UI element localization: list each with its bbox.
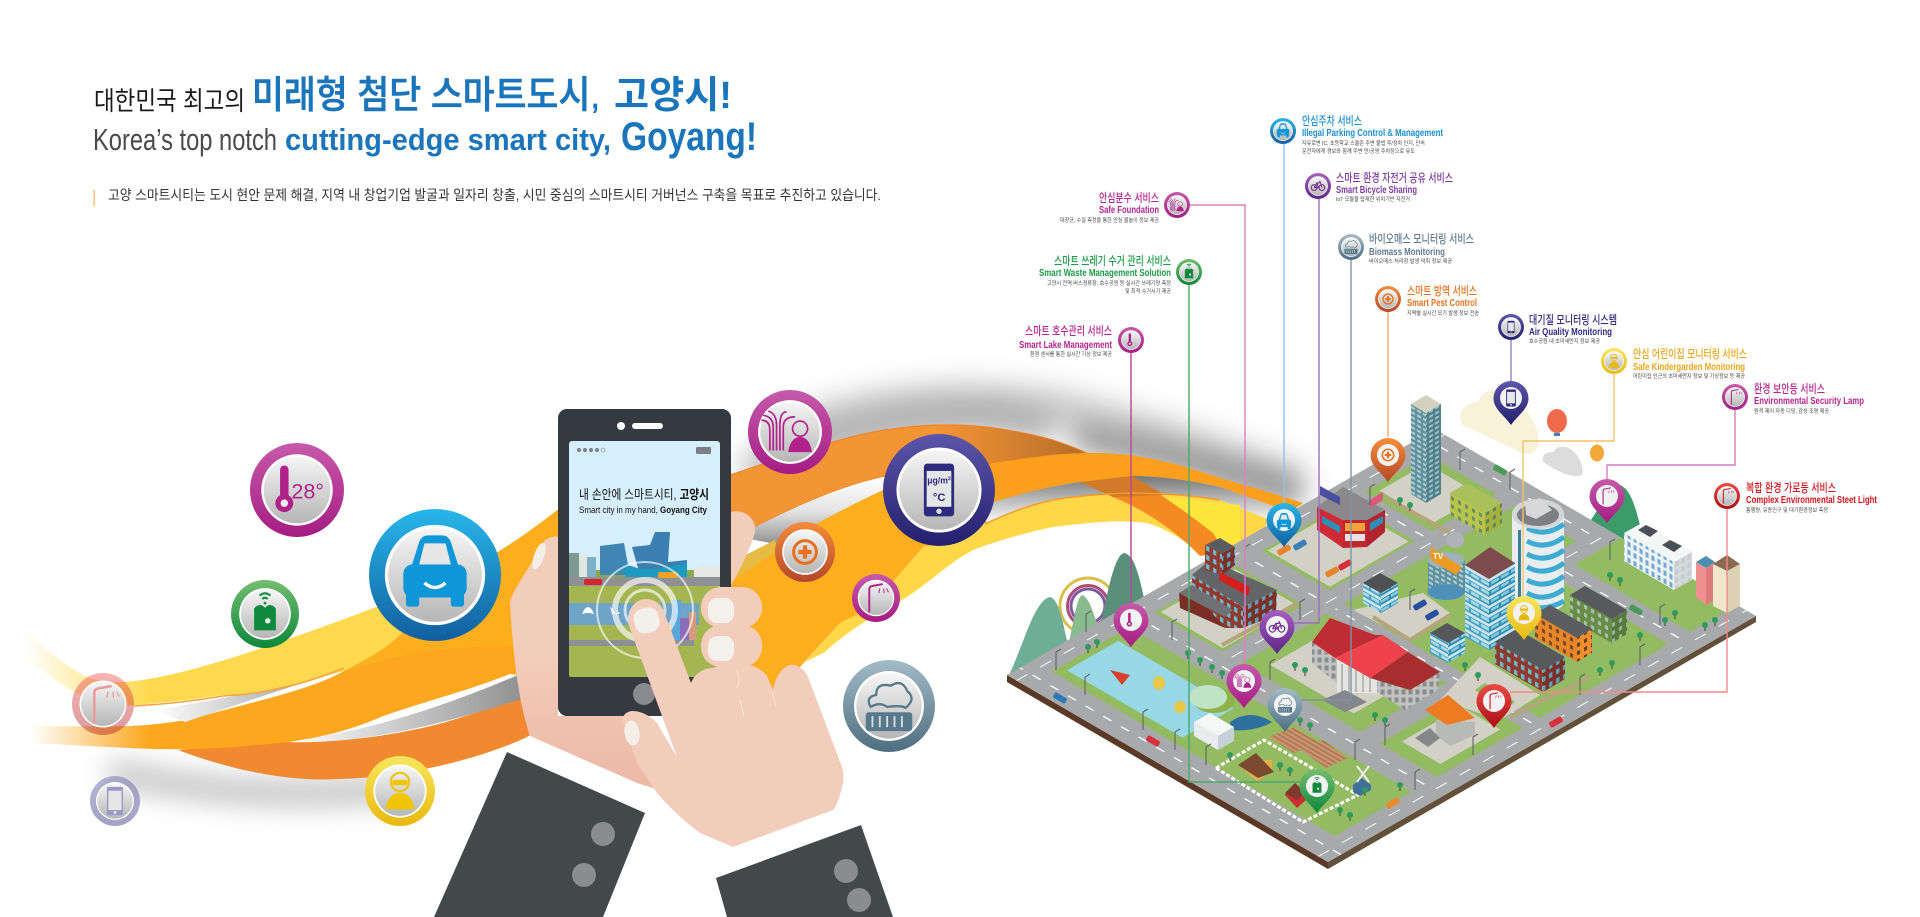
label: security lamp service: 환경 보안등 서비스 (1754, 382, 1825, 396)
label: parking service (1270, 114, 1443, 155)
label: pest control service: 지역별 실시간 모기 발생 정보 전송 (1407, 309, 1479, 317)
label: bicycle service: IoT 모듈을 탑재한 위치기반 자전거 (1336, 195, 1410, 203)
label: kindergarten service: 안심 어린이집 모니터링 서비스 (1633, 347, 1747, 361)
label: biomass service (1338, 232, 1474, 265)
label: biomass service: 바이오매스 모니터링 서비스 (1369, 232, 1474, 246)
stone walls (1222, 498, 1590, 717)
building: brick school (1495, 629, 1565, 692)
building: small blue block (1363, 573, 1398, 613)
building: windmill (1353, 766, 1371, 796)
phone screen subtitle: Smart city in my hand, Goyang City (579, 505, 708, 516)
cars (1052, 464, 1644, 809)
label: lake management service (1019, 324, 1144, 358)
label: kindergarten service: Safe Kindergarden Monitoring (1633, 361, 1745, 373)
title: Korean line: 고양시! (614, 75, 732, 117)
label: safe foundation service: Safe Foundation (1099, 204, 1159, 216)
intro text: 고양 스마트시티는 도시 현안 문제 해결, 지역 내 창업기업 발굴과 일자리 창출, 시민 중심의 스마트시티 거버넌스 구축을 목표로 추진하고 있습니다. (108, 187, 881, 203)
label: security lamp service: 원격 제어 자동 디밍, 감성 조명 제공 (1754, 407, 1829, 415)
label: biomass service: 바이오매스 처리장 발생 악취 정보 제공 (1369, 257, 1452, 265)
label: air quality system (1498, 313, 1617, 345)
isometric city map (1007, 395, 1756, 869)
label: safe foundation service (1060, 191, 1190, 224)
label: parking service: Illegal Parking Control & Management (1302, 127, 1443, 139)
label: waste service: 및 최적 수거시기 제공 (1125, 287, 1171, 295)
icon: car badge (369, 509, 501, 641)
icon: thermometer badge: 28° (291, 478, 324, 503)
ground plan with roads and blocks (1007, 429, 1756, 862)
map pin: air quality (1494, 381, 1528, 425)
map pin: street light (1476, 684, 1512, 728)
map pin: foundation (1226, 664, 1262, 708)
icon: waste bin badge (231, 580, 299, 648)
building: orange apartment (1535, 605, 1592, 662)
map pin: security lamp (1590, 479, 1624, 523)
hand behind phone (510, 511, 755, 800)
label: parking service: 안심주차 서비스 (1302, 114, 1362, 128)
icon: kindergarten badge (365, 756, 435, 826)
icon: lamp badge (852, 574, 900, 622)
label: parking service: 운전자에게 경보와 함께 주변 민/공영 주차장으로 유도 (1302, 147, 1415, 155)
icon: biomass badge (843, 660, 935, 752)
building: red shop (1317, 486, 1385, 548)
mountains and rainbow behind map (1010, 485, 1642, 690)
left sleeve (434, 752, 645, 917)
map pin: biomass (1268, 688, 1302, 732)
icon: fountain badge (748, 390, 832, 474)
label: security lamp service (1722, 382, 1864, 415)
building: white solar office (1624, 523, 1692, 590)
label: waste service: 스마트 쓰레기 수거 관리 서비스 (1054, 254, 1171, 268)
map pin: parking (1266, 503, 1302, 547)
building: green dormitory (1570, 586, 1627, 643)
label: lake management service: Smart Lake Management (1019, 339, 1112, 351)
pointing hand (623, 587, 844, 847)
icon: air quality badge: μg/m² (927, 475, 951, 486)
building: colored towers (1696, 555, 1740, 613)
label: waste service (1039, 254, 1202, 295)
title: English line (93, 115, 757, 159)
title: English line: Goyang! (621, 115, 757, 159)
label: bicycle service: Smart Bicycle Sharing (1336, 184, 1417, 196)
label: bicycle service: 스마트 환경 자전거 공유 서비스 (1336, 171, 1453, 185)
trees (1085, 497, 1718, 821)
icon: air quality badge: °C (933, 492, 945, 504)
map pin: bicycle (1260, 610, 1294, 654)
label: waste service: 고양시 전역 버스정류장, 호수공원 등 실시간 쓰레기양 측정 (1047, 279, 1171, 287)
building: glass tower (1411, 395, 1441, 503)
label: street light service: 복합 환경 가로등 서비스 (1746, 480, 1836, 495)
label: lake management service: 스마트 호수관리 서비스 (1025, 324, 1112, 338)
street lamps (1056, 449, 1665, 790)
ribbons (20, 402, 1303, 793)
farm fields (1216, 727, 1358, 822)
label: air quality system: Air Quality Monitoring (1529, 326, 1612, 338)
phone screen headline: 내 손안에 스마트시티, 고양시 (579, 487, 709, 502)
jacket cuff white (507, 735, 861, 878)
label: waste service: Smart Waste Management Solution (1039, 267, 1171, 279)
label: security lamp service: Environmental Security Lamp (1754, 395, 1864, 407)
title: English line: cutting-edge smart city, (285, 122, 611, 157)
building: red-roof city hall (1312, 618, 1440, 712)
building: lime hospital (1450, 483, 1502, 535)
label: street light service: Complex Environmental Steet Light (1746, 494, 1877, 506)
building: white pavilion (1194, 713, 1234, 750)
building: blue office (1465, 547, 1515, 650)
icon: pest control badge (775, 522, 835, 582)
label: pest control service: Smart Pest Control (1407, 297, 1477, 309)
label: pest control service: 스마트 방역 서비스 (1407, 284, 1477, 298)
building: orange-roof house (1415, 695, 1475, 747)
icon: thermometer badge (250, 443, 344, 537)
lake objects (1110, 670, 1272, 730)
label: air quality system: 호수공원 내 초미세먼지 정보 제공 (1529, 337, 1600, 345)
leader lines (1131, 144, 1735, 782)
building: small shop (1430, 623, 1465, 663)
label: street light service: 통행량, 유동인구 및 대기환경정보 측정 (1746, 506, 1828, 514)
title: Korean line: 대한민국 최고의 (94, 86, 245, 116)
right sleeve (716, 825, 893, 917)
icon: air quality badge (883, 434, 995, 546)
label: lake management service: 환경 센서를 통한 실시간 기상 정보 제공 (1030, 350, 1112, 358)
label: bicycle service (1305, 171, 1453, 203)
map pin: lake thermometer (1114, 603, 1148, 647)
label: biomass service: Biomass Monitoring (1369, 246, 1445, 258)
building: factory (1179, 538, 1277, 628)
building: farm barn (1238, 753, 1274, 782)
title: Korean line (94, 75, 732, 117)
title: English line: Korea’s top notch (93, 122, 277, 157)
icon: faded street lamp badge (72, 673, 134, 735)
label: safe foundation service: 대장균, 수질 측정을 통한 안심 물놀이 정보 제공 (1060, 216, 1159, 224)
label: safe foundation service: 안심분수 서비스 (1099, 191, 1159, 205)
label: kindergarten service: 어린이집 인근의 초미세먼지 정보 및 기상정보 등 제공 (1633, 372, 1745, 380)
building: TV station (1428, 532, 1465, 600)
phone (558, 409, 731, 716)
label: kindergarten service (1601, 347, 1747, 380)
parking lots and park paving (1353, 593, 1540, 720)
map pin: pest control (1370, 438, 1406, 482)
map pin: kindergarten (1506, 596, 1542, 640)
label: parking service: 자유로변 IC, 초등학교 스쿨존 주변 불법 주/정차 인지, 단속 (1302, 139, 1425, 147)
label: pest control service (1375, 284, 1479, 317)
building: cylinder tower (1512, 498, 1564, 613)
map base edge (1007, 616, 1756, 869)
title: Korean line: 미래형 첨단 스마트도시, (252, 75, 600, 117)
icon: faded air quality badge (90, 776, 140, 826)
label: air quality system: 대기질 모니터링 시스템 (1529, 313, 1617, 327)
building: TV station: TV (1433, 552, 1444, 561)
phone screen (569, 441, 720, 677)
clouds and balloons (1460, 390, 1604, 476)
label: street light service (1714, 480, 1877, 514)
map pin: waste (1300, 769, 1334, 813)
building: red barn (1285, 783, 1306, 808)
